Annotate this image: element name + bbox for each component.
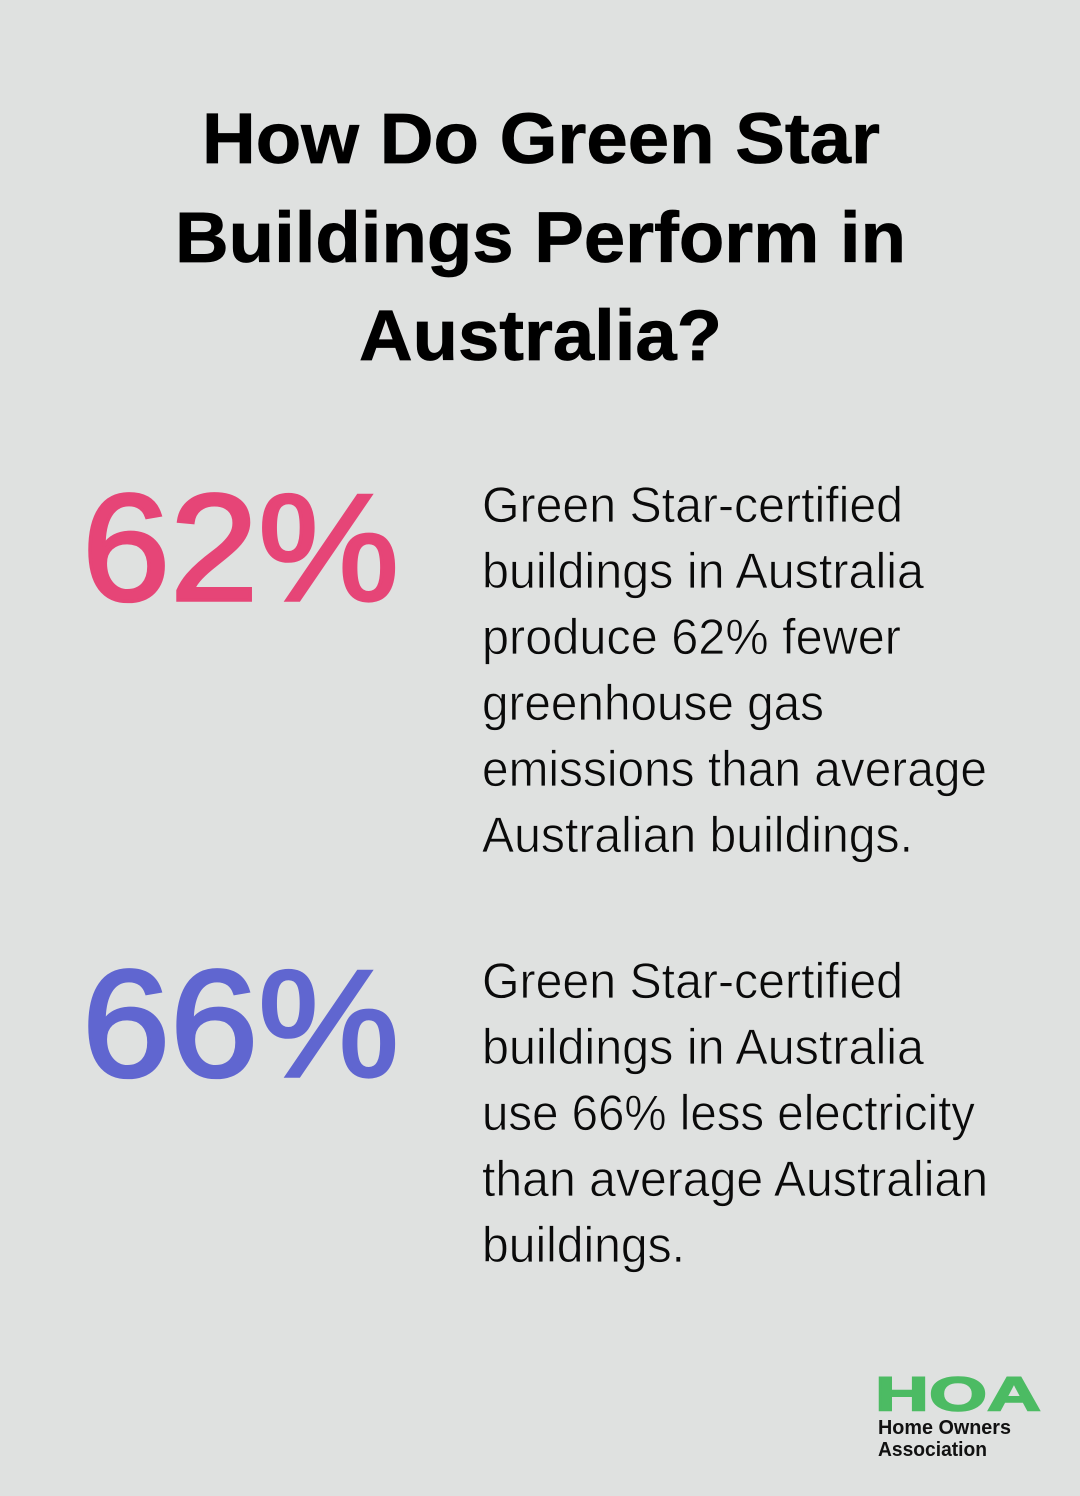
text block: electricity: use 66% less electricity <box>482 1085 975 1141</box>
text block: emissions: Australian buildings. <box>482 807 913 863</box>
text block: emissions: greenhouse gas <box>482 675 824 731</box>
logo: Home Owners Association <box>875 1368 1041 1461</box>
text block: electricity: buildings in Australia <box>482 1019 924 1075</box>
text block: electricity: than average Australian <box>482 1151 988 1207</box>
text block: emissions <box>482 477 987 863</box>
text block: electricity: buildings. <box>482 1217 685 1273</box>
title: How Do Green Star <box>202 100 880 179</box>
logo caption: Association <box>878 1439 987 1461</box>
text block: emissions: buildings in Australia <box>482 543 924 599</box>
logo caption: Home Owners <box>878 1417 1011 1439</box>
title: Buildings Perform in <box>175 199 906 278</box>
logo wordmark: HOA <box>875 1368 1041 1422</box>
title: Australia? <box>359 297 722 376</box>
text block: emissions: emissions than average <box>482 741 987 797</box>
text block: emissions: produce 62% fewer <box>482 609 901 665</box>
stat: 62%: 62% <box>82 463 399 633</box>
text block: electricity <box>482 953 988 1273</box>
text block: electricity: Green Star-certified <box>482 953 903 1009</box>
text block: emissions: Green Star-certified <box>482 477 903 533</box>
logo caption <box>878 1417 1011 1461</box>
stat: 66%: 66% <box>82 939 399 1109</box>
title <box>175 100 906 376</box>
